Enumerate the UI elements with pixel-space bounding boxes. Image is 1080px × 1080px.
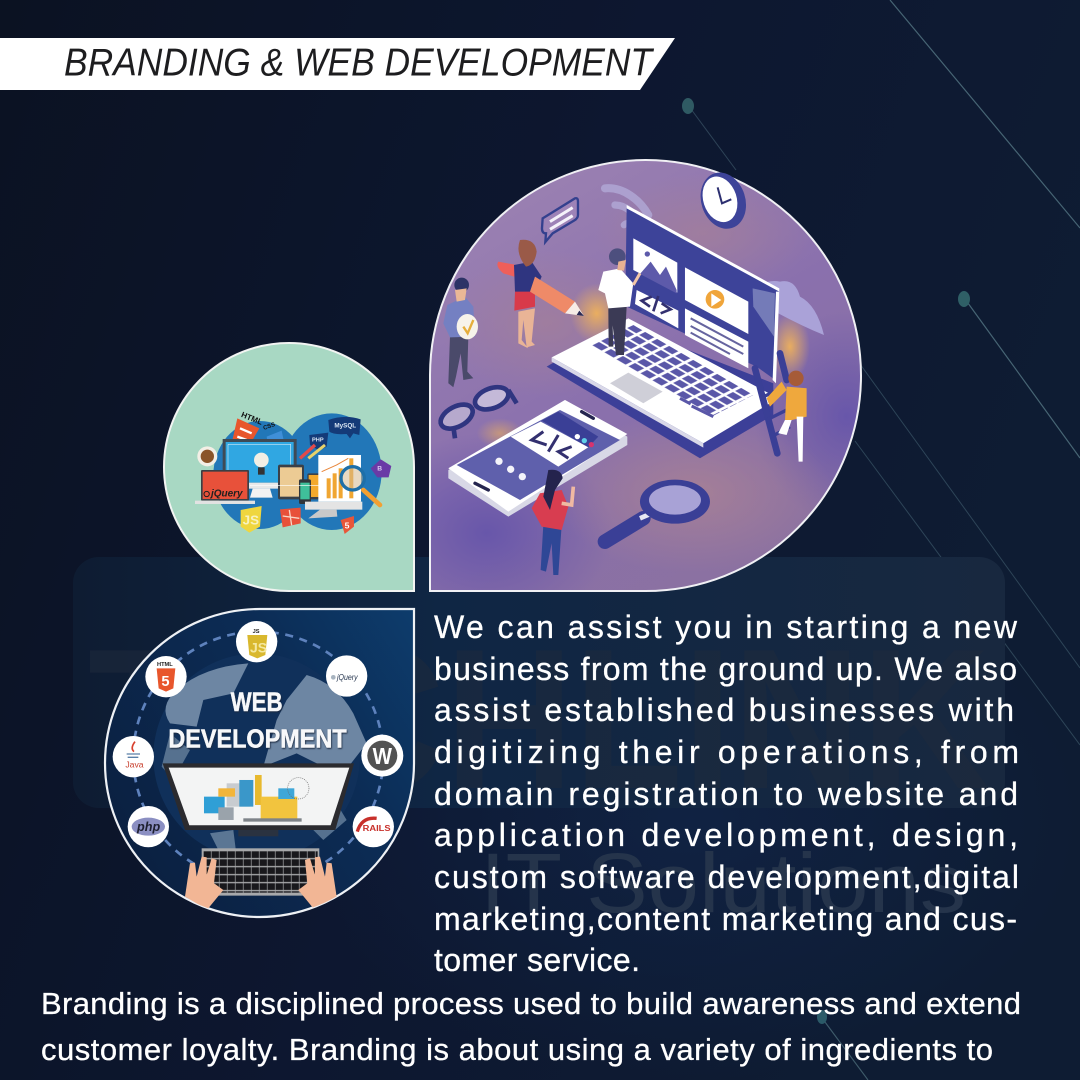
text block: services description: application development, design, <box>434 817 1018 853</box>
person: man on ladder <box>755 353 807 462</box>
icon: wordpress badge <box>361 735 403 777</box>
heading: web development: WEB <box>231 687 283 717</box>
panel: web technologies illustration on mint <box>164 343 414 591</box>
icon: java badge: Java <box>125 759 144 769</box>
icon: html5 badge <box>145 656 187 697</box>
icon: pencil <box>308 445 325 458</box>
heading: web development <box>170 692 348 750</box>
text block: services description: business from the ground up. We also <box>434 651 1017 687</box>
title banner: BRANDING & WEB DEVELOPMENT <box>64 42 655 84</box>
icon: css badge: CSS <box>263 422 276 432</box>
trackpad keys <box>680 398 713 417</box>
watermark subtitle: IT Solutions <box>480 836 966 930</box>
icon: html badge: HTML <box>240 410 264 427</box>
icon: jquery badge: jQuery <box>336 672 358 682</box>
icon: cloud <box>753 281 824 335</box>
icon: php tag: PHP <box>312 437 324 443</box>
icon: js shield <box>241 506 262 533</box>
text block: services description <box>434 609 1019 978</box>
jquery laptop <box>195 470 255 504</box>
text block: branding description: Branding is a disciplined process used to build awareness and extend <box>41 986 1021 1021</box>
person: man on keyboard <box>598 248 640 355</box>
icon: laravel tile <box>280 508 301 527</box>
panel: isometric web design illustration <box>429 159 862 592</box>
panel: web development badge <box>105 609 414 917</box>
icon: css badge <box>263 422 285 447</box>
heading: web development: DEVELOPMENT <box>168 723 347 753</box>
icon: java badge <box>113 736 154 777</box>
icon: jquery badge <box>326 655 367 697</box>
icon: js badge <box>236 621 277 662</box>
icon: bootstrap cube <box>371 459 391 477</box>
icon: php badge <box>128 806 169 847</box>
person: man with check badge <box>443 278 478 387</box>
text block: services description: assist established businesses with <box>434 692 1014 728</box>
icon: bootstrap cube: B <box>377 466 382 473</box>
icon: js badge: JS <box>253 629 260 635</box>
icon: mysql tag: MySQL <box>334 422 356 429</box>
text block: branding description: customer loyalty. Branding is about using a variety of ingredients to <box>41 1032 993 1067</box>
icon: html5 badge: 5 <box>161 674 169 690</box>
watermark panel: TECHLINK <box>88 608 990 831</box>
icon: js shield: JS <box>243 512 259 527</box>
keyboard <box>202 848 319 896</box>
icon: chat bubble <box>542 198 578 242</box>
icon: wall clock <box>694 167 753 235</box>
person: woman with pencil <box>497 240 584 348</box>
icon: wifi arcs <box>605 188 648 232</box>
icon: mysql tag <box>328 417 361 438</box>
icon: html5 shield small: 5 <box>345 521 350 531</box>
text block: branding description <box>41 986 1021 1067</box>
globe <box>153 653 367 860</box>
icon: js badge: JS <box>250 640 267 656</box>
dashed orbit <box>133 632 383 882</box>
monitor <box>163 763 354 836</box>
icon: wordpress badge: W <box>373 743 392 769</box>
text block: services description: domain registration to website and <box>434 776 1018 812</box>
text block: services description: We can assist you in starting a new <box>434 609 1018 645</box>
laptop screen <box>625 205 779 383</box>
icon: rails badge <box>353 806 394 847</box>
icon: rails badge: RAILS <box>363 824 391 833</box>
text block: services description: marketing,content marketing and cus- <box>434 901 1017 937</box>
icon: glasses <box>437 383 517 438</box>
desktop monitor <box>223 439 297 498</box>
laptop <box>547 205 779 458</box>
text block: services description: custom software development,digital <box>434 859 1019 895</box>
jquery laptop: jQuery <box>209 489 243 500</box>
text block: services description: tomer service. <box>434 942 640 978</box>
tablet and phone devices <box>250 465 326 504</box>
hands <box>185 857 337 908</box>
icon: magnifier <box>605 480 710 542</box>
smartphone <box>448 400 627 517</box>
chart monitor <box>305 455 380 518</box>
icon: php badge: php <box>136 820 160 834</box>
icon: coffee cup <box>197 446 217 466</box>
blue cloud backdrop <box>213 413 382 530</box>
person: woman with phone <box>532 470 573 575</box>
icon: html5 shield small <box>341 516 354 534</box>
text block: services description: digitizing their operations, from <box>434 734 1019 770</box>
icon: html5 badge: HTML <box>157 662 173 668</box>
icon: html badge <box>232 410 264 450</box>
icon: php tag <box>309 433 328 451</box>
